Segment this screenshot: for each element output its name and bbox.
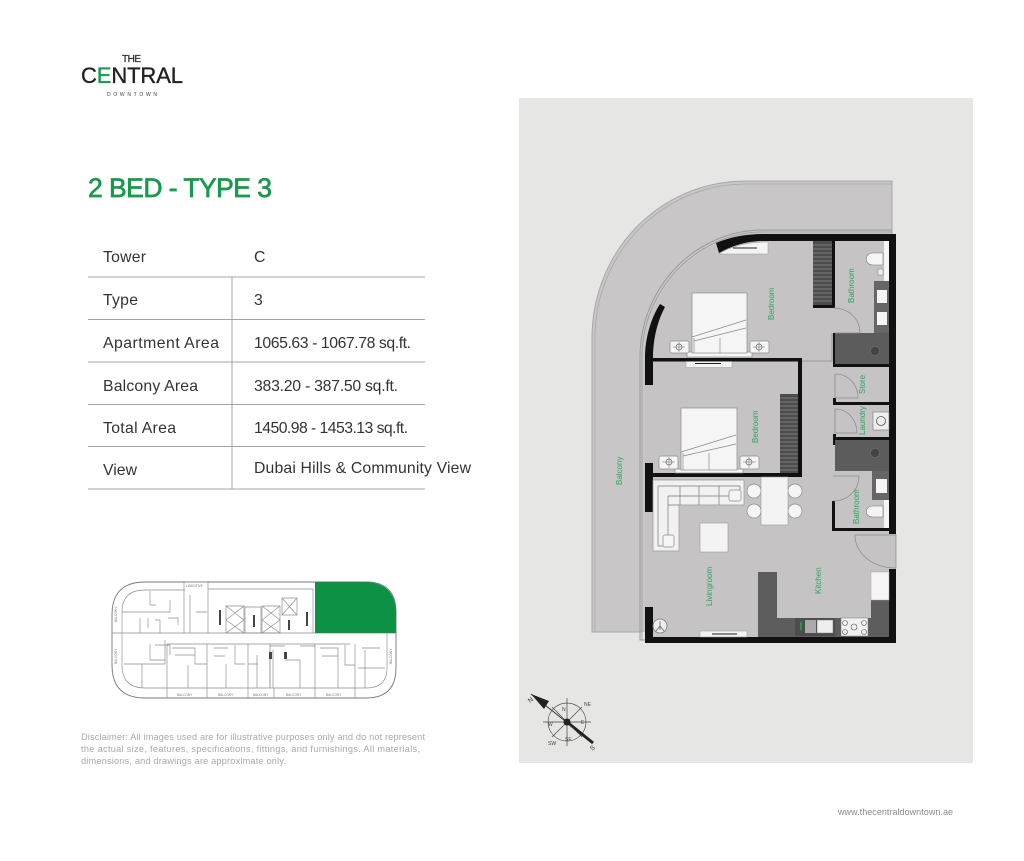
specification table: C [254,249,265,266]
bedroom 2 furniture: Bedroom [751,410,760,443]
disclaimer: dimensions, and drawings are approximate only. [81,756,286,766]
kitchen: Kitchen [814,567,823,594]
compass: SE [565,737,572,743]
bathroom 1: Bathroom [847,268,856,303]
bathroom 2: Bathroom [852,489,861,524]
bathroom 2 [833,440,889,528]
specification table: Balcony Area [103,378,198,395]
compass [527,694,597,753]
wardrobes [780,241,832,473]
entry door area [855,535,896,568]
compass: SW [548,741,556,747]
logo [81,54,183,98]
key plan: BALCONY [177,693,193,697]
disclaimer [81,732,425,766]
specification table: 1450.98 - 1453.13 sq.ft. [254,420,408,437]
compass: N [527,696,535,705]
specification table: Apartment Area [103,335,219,352]
disclaimer: Disclaimer: All images used are for illustrative purposes only and do not represent [81,732,425,742]
specification table: View [103,462,138,479]
laundry [835,406,889,435]
title: 2 BED - TYPE 3 [88,173,272,203]
key plan: BALCONY [253,693,269,697]
website url: www.thecentraldowntown.ae [837,807,953,817]
key plan: LINDOTIVE [186,584,203,588]
key plan: BALCONY [286,693,302,697]
specification table [88,249,472,489]
compass: N [562,707,566,713]
laundry: Laundry [858,406,867,435]
logo: DOWNTOWN [107,92,157,98]
bedroom 2 furniture [659,408,760,473]
key plan: BALCONY [114,606,118,622]
specification table: 3 [254,292,263,309]
floor plan panel [519,98,973,763]
store: Store [858,374,867,394]
logo: THE [122,54,141,65]
specification table: Total Area [103,420,176,437]
compass: E [581,720,585,726]
specification table: Dubai Hills & Community View [254,460,472,477]
specification table: 383.20 - 387.50 sq.ft. [254,378,398,395]
apartment floor [645,234,896,643]
windows and AC units [686,242,768,637]
logo: CENTRAL [81,63,183,88]
bedroom 1 furniture: Bedroom [767,287,776,320]
specification table: 1065.63 - 1067.78 sq.ft. [254,335,411,352]
compass: W [548,722,553,728]
disclaimer: the actual size, features, specifications, fittings, and furnishings. All materials, [81,744,420,754]
balcony [592,181,892,640]
exterior and interior walls [645,234,896,643]
key plan: BALCONY [218,693,234,697]
key plan [112,582,396,698]
store [835,374,867,398]
key plan: BALCONY [114,648,118,664]
living and dining furniture: Livingroom [705,567,714,606]
balcony: Balcony [615,457,624,485]
hallway lines [801,333,832,470]
bedroom 1 furniture [670,287,776,357]
key plan: BALCONY [326,693,342,697]
specification table: Type [103,292,138,309]
kitchen [758,567,889,637]
key plan: BALCONY [389,648,393,664]
compass: NE [584,702,592,708]
living and dining furniture [653,477,802,633]
compass: S [589,744,597,753]
bathroom 1 [833,241,889,364]
specification table: Tower [103,249,146,266]
